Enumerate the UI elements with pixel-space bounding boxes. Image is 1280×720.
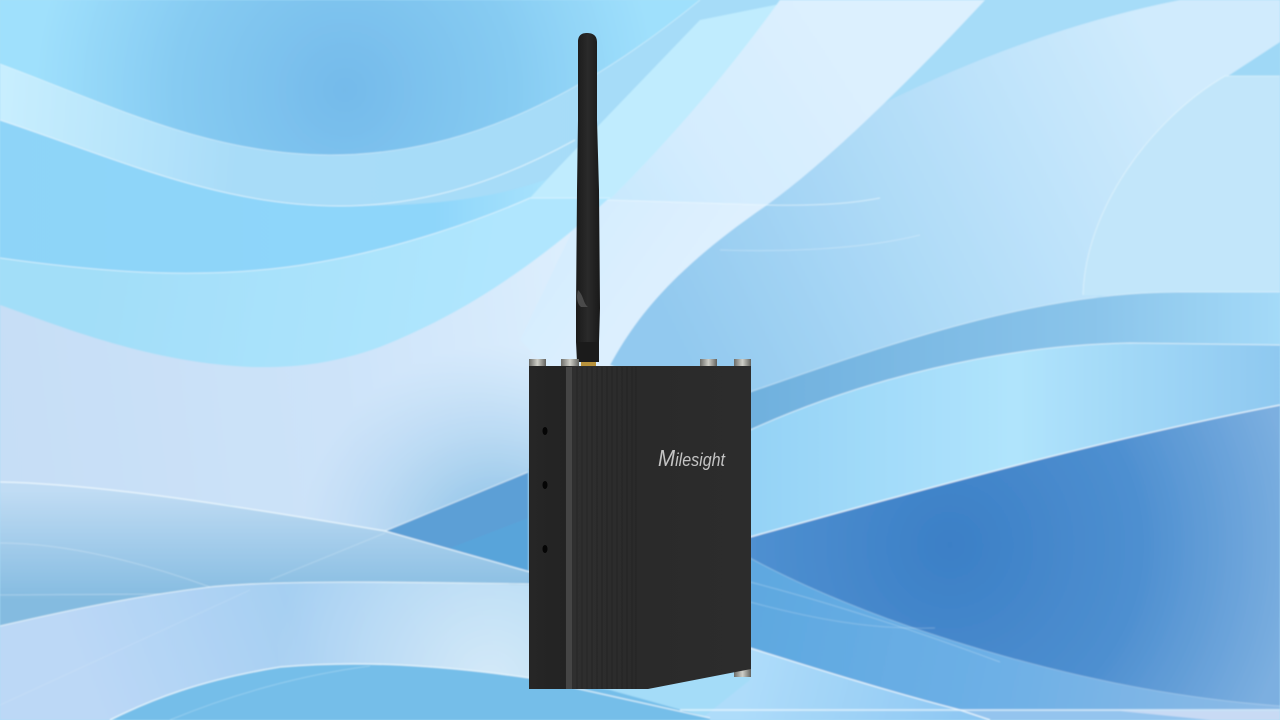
bottom-right light ribbon (700, 648, 990, 720)
right bright band (750, 343, 1280, 537)
centre white sweep lower (520, 200, 767, 380)
right darker strip (750, 292, 1280, 430)
antenna: knurled nut (577, 342, 599, 362)
bottom blue pool (110, 664, 710, 720)
right light field (610, 0, 1280, 392)
top-left light ribbon (0, 0, 780, 206)
pale wedge beside antenna (530, 0, 800, 210)
fins (577, 367, 636, 689)
left lower blue ribbon (0, 198, 610, 367)
logo: Milesight (658, 445, 726, 471)
gateway device (529, 359, 751, 689)
antenna: whip and collar body (576, 33, 600, 362)
blue shard lower tone (450, 518, 528, 572)
top right corner wedge (1228, 42, 1280, 76)
bottom strip pale tip (1120, 711, 1280, 720)
antenna (576, 33, 600, 367)
side ridge (566, 367, 572, 689)
antenna: gold connector (581, 360, 596, 367)
bottom-left ribbon highlight (270, 582, 530, 678)
screw holes (542, 427, 548, 553)
lower-right mid ribbon (750, 558, 1280, 720)
top-left blue field (0, 0, 790, 210)
antenna: hinge (577, 290, 588, 307)
far-right pale panel (1083, 76, 1280, 295)
centre white sweep upper (607, 0, 985, 205)
blue shard centre-left (385, 472, 528, 572)
right deep blue field (750, 405, 1280, 720)
top right field (760, 0, 1280, 210)
lower-left upper field (0, 482, 530, 626)
left middle band (0, 120, 640, 290)
lavender central field (0, 200, 700, 580)
lower field shading (300, 340, 530, 575)
bottom strip (960, 710, 1280, 720)
bottom-left ribbon (0, 582, 530, 720)
device body (529, 366, 751, 689)
top mounting pins (529, 359, 751, 677)
